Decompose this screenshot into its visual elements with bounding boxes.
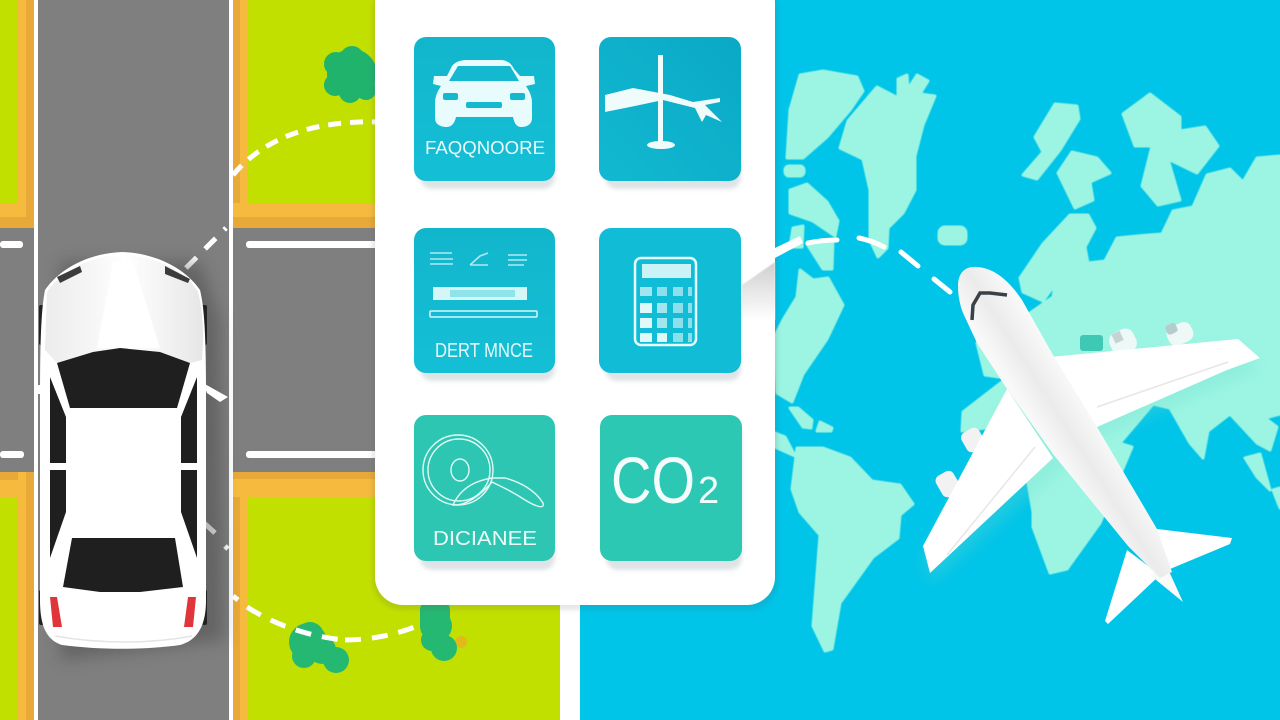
tile label: FAQQNOORE: [425, 138, 545, 158]
car: hood highlight: [97, 262, 160, 348]
map: north america lower: [775, 270, 843, 402]
car: tail lights: [50, 597, 196, 627]
card shadow: [372, 0, 778, 610]
plane: tail fin: [1150, 565, 1183, 602]
car: headlights: [57, 266, 190, 283]
map: south east islands: [1245, 454, 1280, 508]
icon: car front: [433, 60, 535, 127]
car: side slivers: [39, 305, 207, 625]
map: small islands west: [785, 166, 966, 269]
tile: plane route: [599, 37, 741, 189]
route: dashed path bottom: [203, 522, 420, 640]
kerbs: orange borders: [0, 0, 378, 720]
plane: tail left: [1105, 550, 1160, 624]
map: eurasia: [1010, 156, 1280, 460]
road: vertical lane: [34, 0, 233, 720]
plane: engines: [933, 319, 1196, 499]
car shadow: [60, 262, 224, 660]
icon: magnifier outline: [423, 435, 543, 507]
car: mirrors: [35, 383, 228, 402]
tile: car fare: [414, 37, 555, 189]
plane shadow: [923, 349, 1260, 583]
map: northern islands: [1023, 94, 1218, 208]
map: africa: [962, 320, 1132, 573]
car: rear window: [63, 538, 183, 592]
road: horizontal crossing: [0, 228, 380, 472]
plane: right wing: [1050, 339, 1260, 460]
route: dashed path leaving car bonnet: [186, 228, 226, 268]
car: windshield: [57, 348, 190, 408]
airplane: [923, 267, 1260, 624]
icon: bottom right bush: [420, 600, 467, 661]
car: [35, 252, 228, 660]
world map: [775, 71, 1280, 651]
route: dashed flight path: [808, 238, 950, 292]
icon: plane silhouette: [605, 55, 722, 149]
road markings: [0, 0, 378, 720]
white card panel: [372, 0, 778, 610]
icon: calculator: [635, 258, 696, 345]
plane: left wing: [923, 389, 1053, 573]
CO2 label: CO: [611, 443, 695, 517]
plane: fuselage: [958, 267, 1172, 578]
tile label: DICIANEE: [433, 528, 537, 550]
car: hood shading: [45, 255, 203, 363]
plane: wing detail lines: [947, 362, 1228, 555]
tile label: DERT MNCE: [435, 340, 533, 362]
flight line leaving card: [775, 236, 803, 258]
tile: CO2: [600, 415, 742, 570]
map: caribbean islands: [775, 408, 832, 456]
icon: slider: [430, 311, 537, 317]
icon: top tree: [324, 46, 377, 103]
tile: calculator: [599, 228, 741, 381]
CO2 subscript: 2: [698, 470, 719, 512]
icon: bottom left bush: [289, 622, 349, 673]
map: south america: [792, 448, 913, 651]
tile: distance: [414, 228, 555, 381]
car: body: [40, 252, 206, 649]
route: dashed path from car to card, top: [233, 122, 378, 175]
plane: tail right: [1150, 529, 1232, 570]
map: greenland: [840, 75, 935, 257]
car: rear bumper line: [55, 636, 192, 642]
icon: progress bar: [433, 287, 527, 300]
icon: data lines: [430, 253, 527, 265]
car: side windows: [50, 377, 197, 558]
card shading under flight line: [742, 262, 775, 320]
card body: [375, 0, 775, 605]
map: north west landmass: [787, 71, 863, 158]
icon: car windscreen and grille: [443, 66, 525, 108]
tile: distance lens: [414, 415, 555, 570]
plane: cockpit window: [972, 293, 1007, 320]
